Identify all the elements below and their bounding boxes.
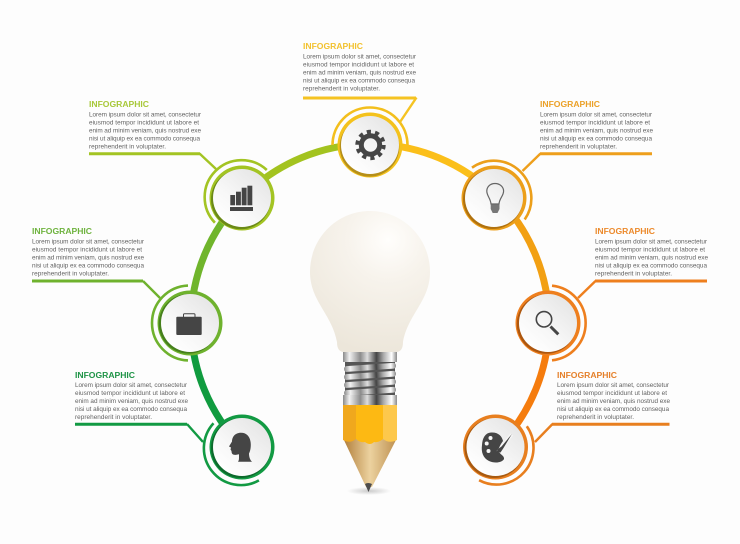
- text block: head: [75, 370, 203, 442]
- screw base: [343, 352, 397, 405]
- text block: chart: Lorem ipsum dolor sit amet, consectetur: [89, 112, 202, 118]
- icon: palette: [482, 432, 512, 463]
- node: light bulb: [462, 161, 531, 230]
- text block: head: Lorem ipsum dolor sit amet, consectetur: [75, 382, 188, 389]
- icon: bar chart: [230, 186, 253, 211]
- text block: magnifier: nisi ut aliquip ex ea commodo consequa: [595, 262, 707, 270]
- text block: light bulb: eiusmod tempor incididunt ut labore et: [540, 120, 650, 126]
- light bulb pencil: [310, 211, 430, 495]
- text block: chart: enim ad minim veniam, quis nostrud exe: [89, 128, 201, 134]
- text block: palette: Lorem ipsum dolor sit amet, consectetur: [557, 382, 670, 389]
- text block: light bulb: enim ad minim veniam, quis nostrud exe: [540, 128, 653, 134]
- text block: light bulb: [522, 99, 653, 171]
- icon: gear: [358, 132, 384, 158]
- bulb glass: [310, 211, 430, 352]
- outer arc: [552, 286, 586, 360]
- text block: head: reprehenderit in voluptater.: [75, 414, 152, 421]
- disc: [519, 294, 577, 352]
- text block: light bulb: Lorem ipsum dolor sit amet, consectetur: [540, 112, 653, 118]
- text block: briefcase: nisi ut aliquip ex ea commodo consequa: [32, 262, 144, 270]
- pencil lead: [365, 483, 372, 492]
- text block: head: eiusmod tempor incididunt ut labore et: [75, 390, 185, 397]
- node: briefcase: [152, 286, 222, 360]
- text block: palette: enim ad minim veniam, quis nostrud exe: [557, 398, 670, 405]
- icon: magnifier: [536, 312, 558, 334]
- text block: head: nisi ut aliquip ex ea commodo consequa: [75, 406, 187, 413]
- text block: chart: reprehenderit in voluptater.: [89, 144, 166, 150]
- disc: [213, 418, 271, 476]
- text block: magnifier: enim ad minim veniam, quis nostrud exe: [595, 254, 708, 262]
- text block: magnifier: INFOGRAPHIC: [595, 226, 655, 236]
- text block: light bulb: INFOGRAPHIC: [540, 99, 600, 109]
- text block: briefcase: reprehenderit in voluptater.: [32, 270, 109, 278]
- text block: briefcase: enim ad minim veniam, quis nostrud exe: [32, 254, 144, 262]
- text block: chart: [89, 99, 216, 169]
- main arc: [191, 144, 549, 447]
- disc: [466, 418, 524, 476]
- text block: top: nisi ut aliquip ex ea commodo consequa: [303, 78, 415, 84]
- text block: top: [303, 41, 417, 122]
- text block: magnifier: reprehenderit in voluptater.: [595, 270, 672, 278]
- text block: briefcase: [32, 226, 160, 298]
- text block: magnifier: [578, 226, 708, 298]
- text block: magnifier: eiusmod tempor incididunt ut labore et: [595, 246, 705, 254]
- text block: palette: eiusmod tempor incididunt ut labore et: [557, 390, 667, 397]
- text block: top: reprehenderit in voluptater.: [303, 86, 380, 92]
- text block: palette: INFOGRAPHIC: [557, 370, 617, 380]
- outer arc: [152, 286, 188, 360]
- text block: chart: INFOGRAPHIC: [89, 99, 149, 109]
- pencil tip shadow: [347, 487, 391, 495]
- icon: briefcase: [176, 314, 202, 335]
- text block: head: enim ad minim veniam, quis nostrud exe: [75, 398, 188, 405]
- text block: head: INFOGRAPHIC: [75, 370, 135, 380]
- disc: [213, 169, 271, 227]
- text block: light bulb: reprehenderit in voluptater.: [540, 144, 617, 150]
- text block: palette: reprehenderit in voluptater.: [557, 414, 634, 421]
- node: palette: [463, 414, 534, 485]
- outer arc: [472, 161, 531, 220]
- node: bar chart: [205, 160, 274, 230]
- text block: magnifier: Lorem ipsum dolor sit amet, consectetur: [595, 238, 708, 246]
- text block: chart: eiusmod tempor incididunt ut labore et: [89, 120, 199, 126]
- disc: [161, 294, 219, 352]
- outer arc: [479, 426, 534, 485]
- text block: top: INFOGRAPHIC: [303, 41, 363, 51]
- outer arc: [332, 108, 408, 145]
- node: gear: [332, 108, 408, 178]
- icon: head: [229, 433, 252, 462]
- pencil wood: [343, 438, 397, 487]
- text block: palette: nisi ut aliquip ex ea commodo consequa: [557, 406, 669, 413]
- text block: briefcase: eiusmod tempor incididunt ut labore et: [32, 246, 142, 254]
- disc: [341, 116, 399, 174]
- text block: top: enim ad minim veniam, quis nostrud exe: [303, 70, 416, 76]
- outer arc: [205, 160, 267, 223]
- text block: light bulb: nisi ut aliquip ex ea commodo consequa: [540, 136, 652, 142]
- disc: [465, 169, 523, 227]
- text block: top: Lorem ipsum dolor sit amet, consectetur: [303, 54, 417, 60]
- pencil body: [343, 405, 397, 444]
- text block: briefcase: INFOGRAPHIC: [32, 226, 92, 236]
- text block: top: eiusmod tempor incididunt ut labore et: [303, 62, 414, 68]
- node: head: [204, 414, 274, 485]
- node: magnifier: [516, 286, 586, 360]
- text block: chart: nisi ut aliquip ex ea commodo consequa: [89, 136, 200, 142]
- text block: briefcase: Lorem ipsum dolor sit amet, consectetur: [32, 238, 145, 246]
- text block: palette: [535, 370, 670, 442]
- icon: light bulb: [487, 184, 504, 213]
- outer arc: [204, 423, 259, 485]
